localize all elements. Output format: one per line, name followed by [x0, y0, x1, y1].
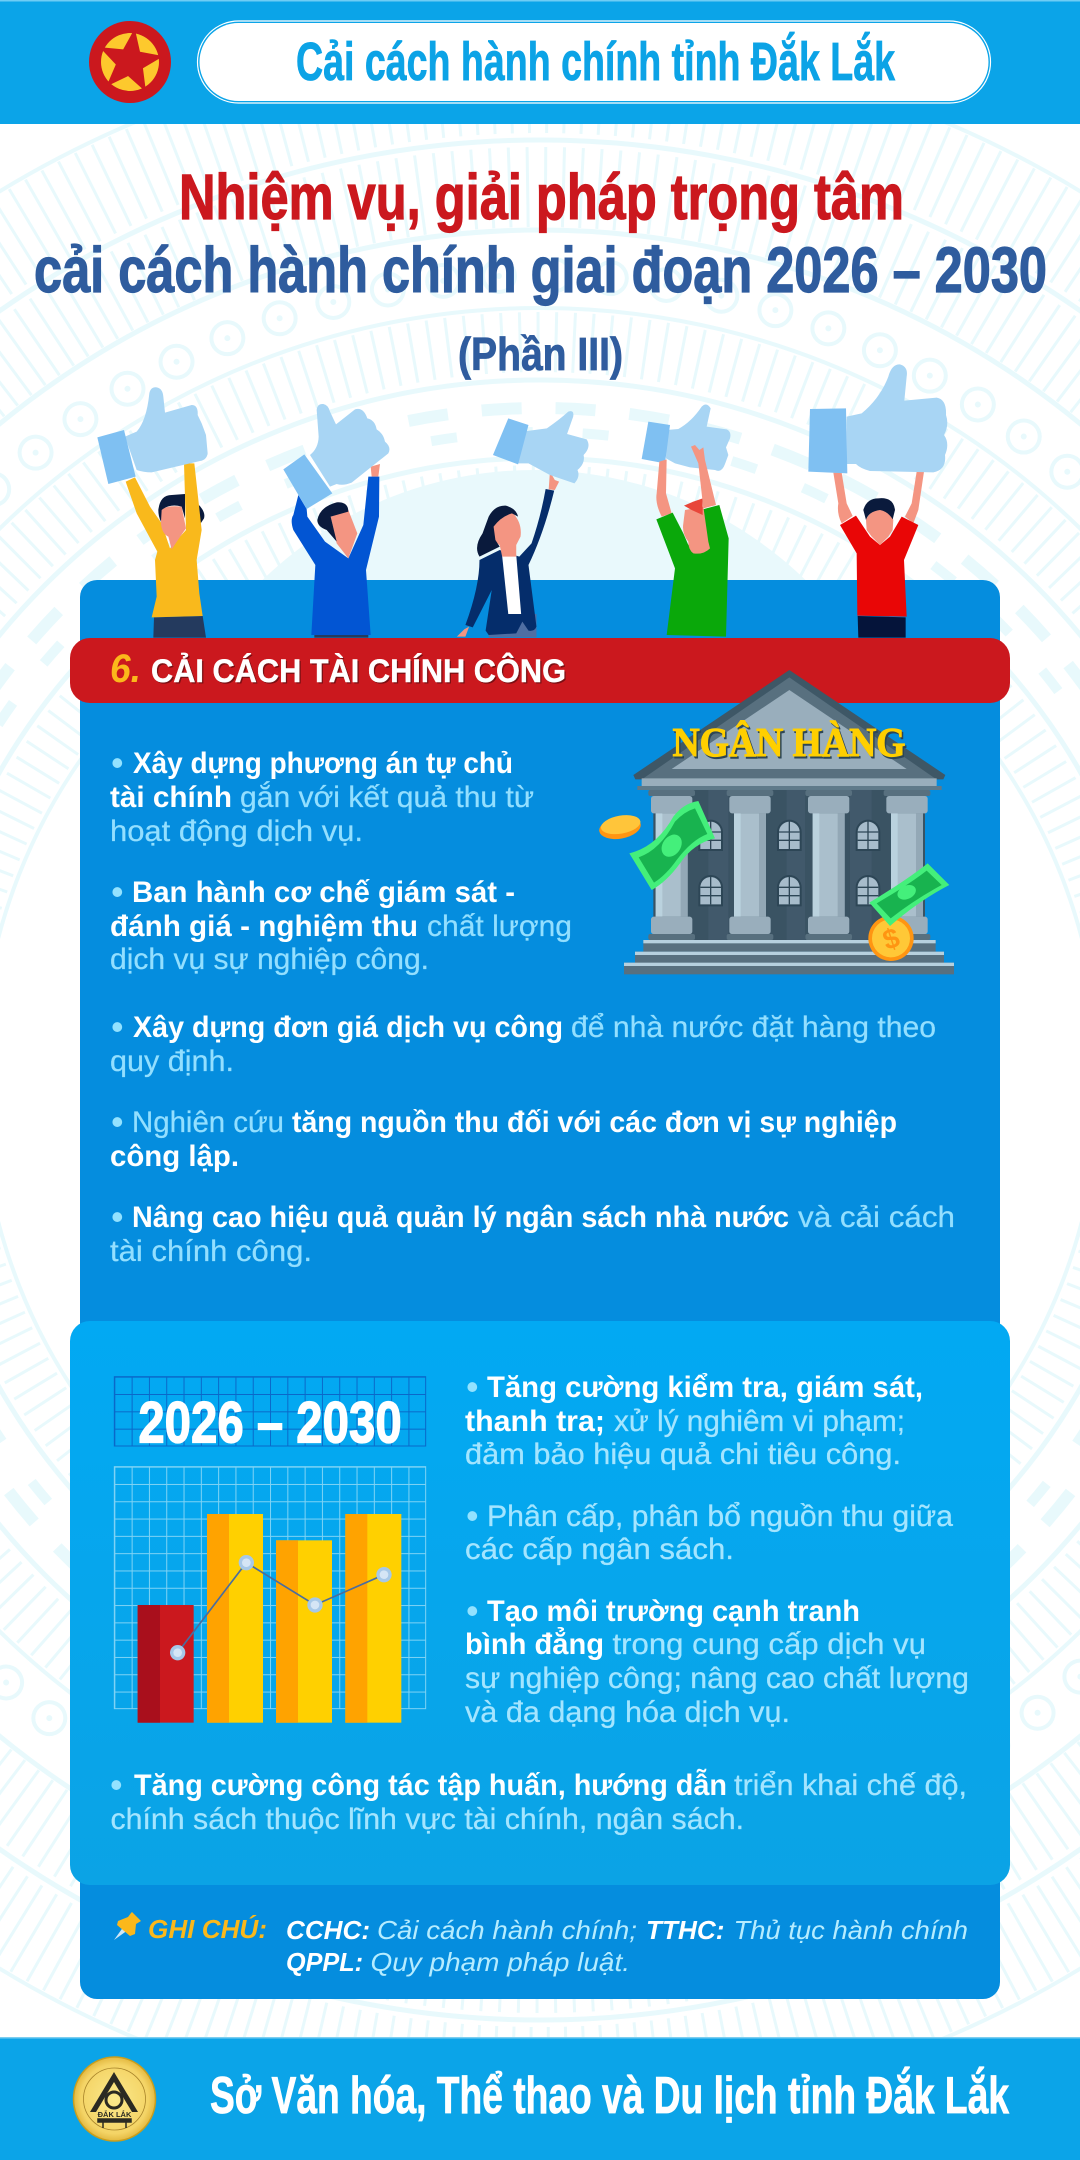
- notes: CCHC:: [286, 1915, 370, 1945]
- main title: [34, 161, 1047, 380]
- bullet: cơ chế giám sát: •: [111, 871, 124, 912]
- bullet: kiểm tra giám sát: xử lý nghiêm vi phạm;: [614, 1405, 905, 1438]
- bullet: cơ chế giám sát: chất lượng: [427, 910, 572, 943]
- chart grid: [114, 1467, 426, 1709]
- bank label: NGÂN HÀNG: [674, 721, 907, 767]
- icon: banknote right: [869, 863, 949, 926]
- bullet: kiểm tra giám sát: •: [466, 1366, 479, 1407]
- bullet: phân cấp: các cấp ngân sách.: [465, 1533, 734, 1566]
- bullet: tập huấn: triển khai chế độ,: [734, 1769, 967, 1802]
- bullet: môi trường cạnh tranh: sự nghiệp công; nâng cao chất lượng: [465, 1662, 969, 1695]
- person: blue sweater: [283, 404, 389, 638]
- bullet: nguồn thu: công lập.: [110, 1140, 239, 1173]
- bank roof: [633, 670, 945, 790]
- bullet: phân cấp: [465, 1495, 953, 1566]
- icon: Dak Lak seal: ĐẮK LẮK: [98, 2110, 132, 2119]
- bullet: tự chủ tài chính: tài chính: [110, 781, 232, 814]
- bullet: môi trường cạnh tranh: trong cung cấp dịch vụ: [612, 1628, 926, 1661]
- bullet: quản lý ngân sách: [110, 1196, 955, 1268]
- bullet: đơn giá dịch vụ công: [110, 1006, 936, 1078]
- person: red shirt: [808, 364, 947, 638]
- trend line: [170, 1555, 392, 1660]
- bullet: kiểm tra giám sát: Tăng cường kiểm tra, giám sát,: [487, 1371, 923, 1404]
- bullet: cơ chế giám sát: dịch vụ sự nghiệp công.: [110, 943, 429, 976]
- text block: top bullet list: [110, 742, 955, 1268]
- icon: dollar coin: [868, 916, 914, 961]
- bullet: nguồn thu: tăng nguồn thu đối với các đơn vị sự nghiệp: [292, 1106, 897, 1139]
- bullet: cơ chế giám sát: đánh giá - nghiệm thu: [110, 910, 418, 943]
- bullet: đơn giá dịch vụ công: quy định.: [110, 1045, 234, 1078]
- notes: GHI CHÚ:: [148, 1914, 267, 1944]
- bullet: đơn giá dịch vụ công: để nhà nước đặt hàng theo: [571, 1011, 936, 1044]
- section 6 heading band: 6.: [110, 647, 141, 691]
- bullet: tự chủ tài chính: Xây dựng phương án tự chủ: [133, 747, 513, 780]
- footer bar: [0, 2037, 1080, 2160]
- light half circle behind people: [144, 470, 924, 1250]
- top header bar: [0, 0, 1080, 124]
- bullet: tập huấn: •: [110, 1764, 123, 1805]
- bullet: tự chủ tài chính: gắn với kết quả thu từ: [240, 781, 534, 814]
- bullet: tập huấn: Tăng cường công tác tập huấn, hướng dẫn: [134, 1768, 727, 1802]
- section 6 heading band: CẢI CÁCH TÀI CHÍNH CÔNG: [152, 654, 568, 690]
- bullet: môi trường cạnh tranh: [465, 1590, 969, 1729]
- header pill: [198, 21, 990, 103]
- bullet: quản lý ngân sách: •: [111, 1196, 124, 1237]
- year label with grid: [114, 1377, 426, 1456]
- icon: Dak Lak seal: [74, 2057, 156, 2141]
- bullet: nguồn thu: [110, 1101, 897, 1173]
- person: green shirt: [642, 405, 730, 637]
- bullet: môi trường cạnh tranh: bình đẳng: [465, 1627, 604, 1661]
- notes: TTHC:: [646, 1915, 724, 1945]
- bullet: cơ chế giám sát: [110, 871, 572, 976]
- year label with grid: 2026 – 2030: [138, 1392, 402, 1456]
- notes: Thủ tục hành chính: [734, 1915, 968, 1945]
- bullet: cơ chế giám sát: Ban hành cơ chế giám sát -: [132, 876, 515, 909]
- notes: QPPL:: [286, 1947, 363, 1977]
- panel: main blue panel: [80, 580, 1000, 1999]
- section 6 heading band: [70, 638, 1010, 703]
- illustration: people holding thumbs up: [97, 364, 947, 638]
- bullet: tự chủ tài chính: [110, 742, 534, 848]
- bullet: môi trường cạnh tranh: •: [466, 1590, 479, 1631]
- main title: (Phần III): [458, 328, 623, 380]
- bullet: tự chủ tài chính: •: [111, 742, 124, 783]
- bullet: kiểm tra giám sát: thanh tra;: [465, 1405, 605, 1438]
- bullet: tập huấn: [110, 1764, 967, 1836]
- notes: Cải cách hành chính;: [377, 1915, 637, 1945]
- bullet: tự chủ tài chính: hoạt động dịch vụ.: [110, 815, 363, 848]
- person: yellow sweater: [97, 387, 208, 638]
- icon: push pin: [114, 1912, 141, 1940]
- bullet: phân cấp: Phân cấp, phân bổ nguồn thu giữa: [487, 1500, 953, 1533]
- icon: flying coin: [597, 812, 643, 842]
- bank label: NGÂN HÀNG: [672, 719, 906, 765]
- bullet: môi trường cạnh tranh: Tạo môi trường cạnh tranh: [487, 1595, 860, 1628]
- main title: Nhiệm vụ, giải pháp trọng tâm: [179, 161, 904, 233]
- bars: [138, 1514, 401, 1723]
- person: navy blazer: [457, 411, 589, 637]
- bullet: nguồn thu: Nghiên cứu: [132, 1106, 284, 1139]
- bullet: quản lý ngân sách: và cải cách: [798, 1201, 955, 1234]
- icon: banknote left: [629, 801, 715, 890]
- illustration: bank building: [597, 670, 954, 974]
- icon: dollar coin: $: [879, 922, 904, 956]
- bullet: kiểm tra giám sát: [465, 1366, 923, 1471]
- bullet: nguồn thu: •: [111, 1101, 124, 1142]
- panel: light blue panel: [70, 1321, 1010, 1885]
- notes: Quy phạm pháp luật.: [370, 1947, 630, 1977]
- bullet: môi trường cạnh tranh: và đa dạng hóa dịch vụ.: [465, 1696, 790, 1729]
- chart: 2026–2030 bar chart: [114, 1377, 426, 1723]
- bullet: quản lý ngân sách: tài chính công.: [110, 1235, 312, 1268]
- notes: [114, 1912, 968, 1977]
- icon: administrative reform emblem: [89, 21, 171, 103]
- section 6 heading band: CẢI CÁCH TÀI CHÍNH CÔNG: [151, 653, 566, 689]
- bank facade: [648, 790, 930, 940]
- bullet: quản lý ngân sách: Nâng cao hiệu quả quản lý ngân sách nhà nước: [132, 1201, 789, 1234]
- bullet: tập huấn: chính sách thuộc lĩnh vực tài chính, ngân sách.: [110, 1803, 744, 1836]
- bullet: kiểm tra giám sát: đảm bảo hiệu quả chi tiêu công.: [465, 1438, 901, 1471]
- bank steps: [624, 940, 954, 974]
- bullet: đơn giá dịch vụ công: •: [111, 1006, 124, 1047]
- bullet: đơn giá dịch vụ công: Xây dựng đơn giá dịch vụ công: [133, 1011, 563, 1044]
- bullet: phân cấp: •: [466, 1495, 479, 1536]
